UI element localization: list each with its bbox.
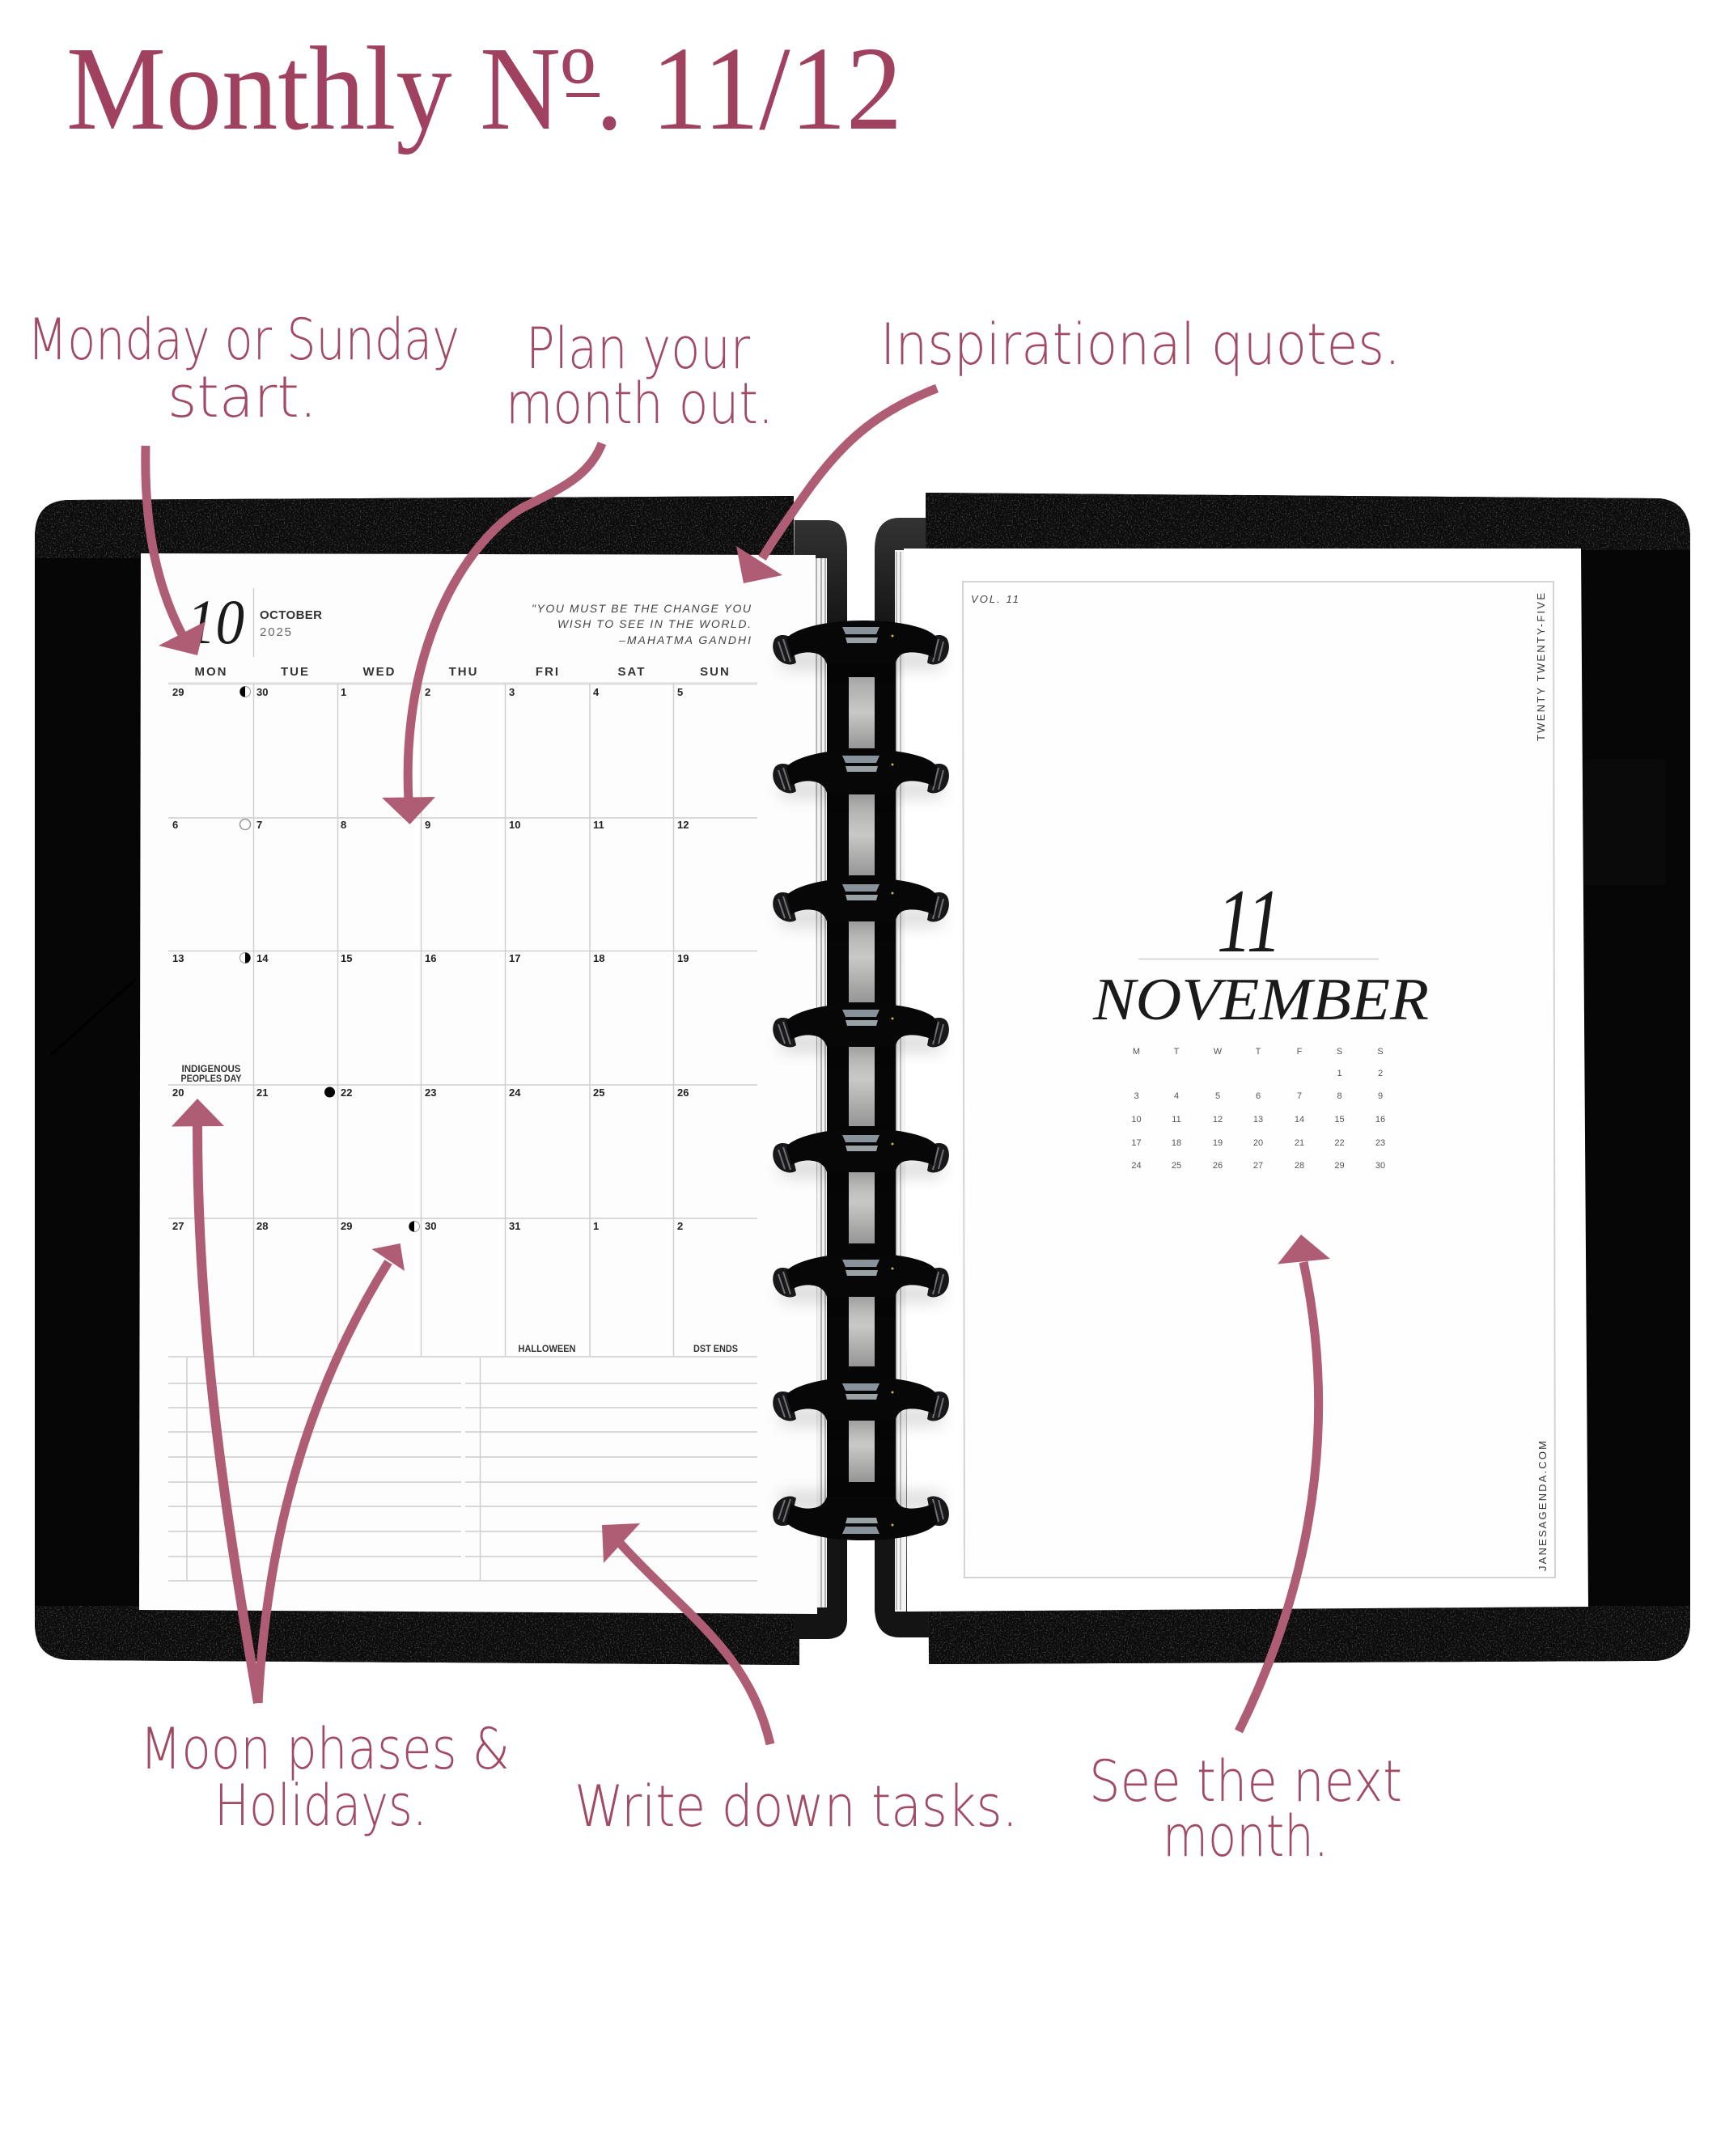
panel: right month cover page [904,549,1588,1612]
mini calendar: 18 [1172,1138,1181,1148]
date numbers: 25 [593,1086,604,1099]
mini calendar: 27 [1253,1161,1263,1171]
mini calendar: 20 [1253,1138,1263,1148]
year: 2025 [260,625,291,639]
quote: WISH TO SEE IN THE WORLD. [557,617,751,630]
panel: left leather cover [32,493,801,1667]
quote: –MAHATMA GANDHI [618,633,751,646]
date numbers: 9 [425,819,430,831]
date numbers: 1 [593,1220,599,1232]
label: Moon phases & Holidays [140,1716,510,1839]
ring spine [827,639,896,1525]
quote [532,602,752,646]
mini calendar: 25 [1172,1161,1181,1171]
mini calendar: 29 [1334,1161,1345,1171]
mini calendar: F [1297,1047,1303,1057]
mini calendar: W [1214,1047,1223,1057]
mini calendar: T [1256,1047,1261,1057]
binder tab: right [875,518,929,1637]
weekday headers: SAT [618,665,646,679]
date numbers: 8 [341,819,346,831]
label: See the next month: See the next [1089,1748,1402,1815]
month name: OCTOBER [260,608,322,622]
mini calendar: 15 [1334,1115,1345,1125]
date numbers: 24 [509,1086,521,1099]
mini calendar: 16 [1375,1115,1385,1125]
task lines [168,1358,757,1581]
date numbers: 12 [677,819,689,831]
date numbers: 26 [677,1086,689,1099]
mini calendar: 22 [1334,1138,1345,1148]
mini calendar: 3 [1134,1091,1139,1101]
date numbers: 10 [509,819,520,831]
binder rings [773,621,949,1540]
label: See the next month [1089,1748,1402,1870]
mini calendar: 28 [1295,1161,1304,1171]
mini calendar: 8 [1337,1091,1342,1101]
volume label: VOL. 11 [971,593,1019,605]
label: Plan your month out [506,316,773,437]
date numbers: 20 [172,1086,184,1099]
date numbers: 11 [593,819,604,831]
arrow: moon phases and holidays, right branch [258,1243,405,1703]
mini calendar: 23 [1375,1138,1385,1148]
date numbers: 21 [256,1086,268,1099]
panel: left monthly calendar page [139,553,817,1614]
holiday labels [181,1063,738,1354]
date numbers: 14 [256,952,269,964]
holiday labels: HALLOWEEN [518,1343,576,1354]
arrow: plan your month out [382,443,602,824]
label: Monday or Sunday start [28,307,460,430]
mini calendar: S [1337,1047,1342,1057]
mini calendar: M [1133,1047,1140,1057]
mini calendar: 12 [1213,1115,1223,1125]
weekday headers: TUE [281,665,310,679]
date numbers: 30 [425,1220,436,1232]
label: Monday or Sunday start: Monday or Sunday [28,307,460,373]
moon phase icons [239,686,419,1231]
arrow: inspirational quotes [736,388,937,583]
mini calendar: 10 [1131,1115,1142,1125]
arrow: Monday or Sunday start [146,446,206,655]
mini calendar: 19 [1213,1138,1223,1148]
calendar grid [168,684,757,1357]
mini calendar: 26 [1213,1161,1223,1171]
holiday labels: PEOPLES DAY [181,1073,241,1084]
date numbers: 2 [425,686,430,698]
inner frame [963,582,1555,1578]
side label: year: TWENTY TWENTY-FIVE [1535,593,1547,741]
mini calendar: 17 [1131,1138,1142,1148]
mini calendar: 1 [1337,1069,1342,1078]
date numbers: 16 [425,952,436,964]
weekday headers: SUN [700,665,731,679]
mini calendar: 4 [1174,1091,1179,1101]
mini calendar: 6 [1256,1091,1261,1101]
date numbers: 23 [425,1086,436,1099]
date numbers: 13 [172,952,184,964]
label: Moon phases & Holidays: Holidays. [214,1773,427,1839]
weekday headers: MON [194,665,228,679]
panel: right leather cover [922,489,1693,1667]
date numbers: 1 [341,686,346,698]
mini calendar: 30 [1375,1161,1385,1171]
month number: 10 [187,587,244,657]
date numbers: 31 [509,1220,520,1232]
weekday headers: WED [362,665,396,679]
side label: website: JANESAGENDA.COM [1536,1441,1549,1571]
label: Moon phases & Holidays: Moon phases & [140,1716,510,1782]
mini calendar: 11 [1172,1115,1181,1125]
date numbers: 2 [677,1220,683,1232]
month name: NOVEMBER [1092,967,1429,1033]
quote: "YOU MUST BE THE CHANGE YOU [532,602,752,615]
holiday labels: INDIGENOUS [181,1063,241,1074]
date numbers: 28 [256,1220,268,1232]
date numbers: 15 [341,952,352,964]
date numbers [172,686,689,1232]
arrow: see the next month [1239,1235,1330,1731]
binder tab: left [795,520,847,1639]
date numbers: 3 [509,686,515,698]
date numbers: 17 [509,952,520,964]
date numbers: 27 [172,1220,184,1232]
mini calendar: T [1174,1047,1180,1057]
arrow: moon phases and holidays, left branch [172,1099,258,1703]
mini calendar: 2 [1378,1069,1383,1078]
binder: open planner [32,489,1693,1667]
date numbers: 7 [256,819,262,831]
arrow: write down tasks [602,1523,770,1744]
date numbers: 4 [593,686,600,698]
title: Monthly Nº. 11/12 [66,23,902,155]
label: See the next month: month. [1163,1803,1329,1870]
page edges: right stack [895,550,906,1612]
label: Write down tasks: Write down tasks. [574,1773,1018,1840]
label: Plan your month out: month out. [506,371,773,437]
mini calendar: 13 [1253,1115,1263,1125]
mini calendar: 24 [1131,1161,1142,1171]
date numbers: 18 [593,952,604,964]
mini calendar: 14 [1295,1115,1304,1125]
mini calendar: 5 [1215,1091,1220,1101]
date numbers: 29 [341,1220,352,1232]
date numbers: 29 [172,686,184,698]
weekday headers [194,665,731,679]
page edges: left stack [814,558,827,1607]
label: Inspirational quotes: Inspirational quotes. [880,311,1401,378]
weekday headers: FRI [536,665,560,679]
mini calendar: 9 [1378,1091,1383,1101]
weekday headers: THU [449,665,478,679]
label: Monday or Sunday start: start. [167,364,317,430]
month number: 11 [1217,871,1282,972]
date numbers: 6 [172,819,178,831]
mini calendar: S [1377,1047,1384,1057]
holiday labels: DST ENDS [693,1343,738,1354]
mini calendar: 7 [1297,1091,1302,1101]
mini calendar: 21 [1295,1138,1304,1148]
mini calendar [1131,1047,1385,1171]
date numbers: 22 [341,1086,352,1099]
date numbers: 5 [677,686,683,698]
date numbers: 19 [677,952,689,964]
label: Plan your month out: Plan your [526,316,750,382]
date numbers: 30 [256,686,268,698]
